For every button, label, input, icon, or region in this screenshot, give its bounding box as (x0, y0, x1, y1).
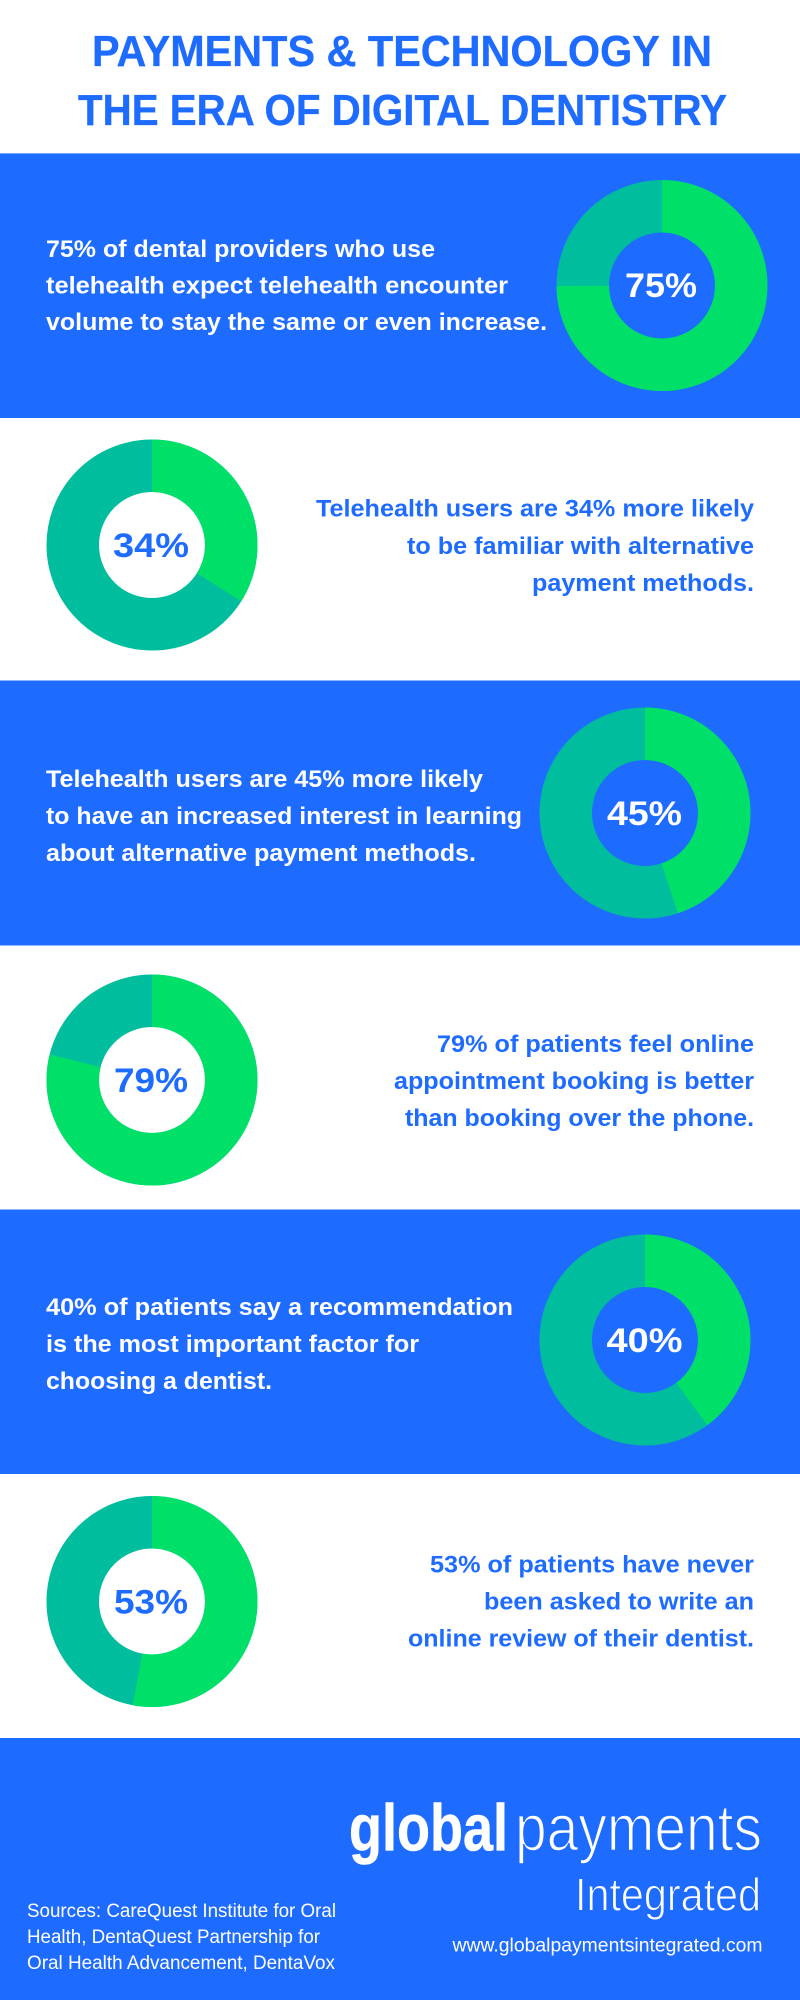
text block: sources: Oral Health Advancement, DentaVox (27, 1953, 335, 1974)
text block: 79% of patients: appointment booking is better (394, 1068, 754, 1095)
panel: 79% online booking (0, 946, 800, 1210)
donut chart: 79%: 79% (114, 1062, 188, 1100)
donut chart: 79% (73, 1001, 231, 1159)
text block: 75% of dental providers: telehealth expect telehealth encounter (46, 272, 508, 300)
logo: global payments integrated: global (349, 1790, 508, 1864)
title: PAYMENTS & TECHNOLOGY IN (92, 28, 712, 76)
donut chart: 34%: 34% (113, 527, 189, 565)
donut chart: 40% (566, 1261, 724, 1419)
text block: telehealth users 45% (46, 766, 522, 867)
logo: global payments integrated: Integrated (575, 1868, 761, 1920)
text block: 40% of patients: is the most important factor for (46, 1331, 419, 1358)
text block: telehealth users 45%: about alternative payment methods. (46, 840, 476, 867)
text block: 79% of patients (394, 1031, 754, 1132)
donut chart: 34% (73, 466, 231, 624)
text block: 53% of patients: been asked to write an (484, 1588, 754, 1616)
text block: 40% of patients (46, 1294, 513, 1395)
text block: 75% of dental providers (46, 236, 547, 336)
text block: telehealth users 34% (316, 496, 755, 597)
title (78, 28, 727, 135)
text block: sources: Sources: CareQuest Institute for Oral (27, 1901, 336, 1922)
donut chart: 53%: 53% (114, 1584, 188, 1622)
text block: 75% of dental providers: 75% of dental providers who use (46, 236, 435, 263)
text block: telehealth users 34%: payment methods. (532, 570, 754, 597)
donut chart: 75% (583, 206, 741, 365)
donut chart: 40%: 40% (606, 1322, 682, 1360)
donut chart: 53% (73, 1522, 231, 1681)
donut chart: 45%: 45% (607, 795, 682, 833)
panel: 45% increased interest (0, 680, 800, 946)
donut chart: 75%: 75% (625, 267, 697, 305)
text block: telehealth users 34%: Telehealth users are 34% more likely (316, 496, 755, 522)
text: website url: www.globalpaymentsintegrated.com (451, 1936, 762, 1956)
logo: global payments integrated: payments (515, 1790, 762, 1864)
text block: 53% of patients: 53% of patients have never (430, 1552, 754, 1578)
logo: global payments integrated (349, 1790, 762, 1920)
panel: 40% recommendation (0, 1210, 800, 1474)
donut chart: 45% (566, 734, 724, 892)
text block: sources (27, 1901, 336, 1974)
title: THE ERA OF DIGITAL DENTISTRY (78, 87, 727, 135)
text block: 53% of patients (408, 1552, 754, 1652)
text block: sources: Health, DentaQuest Partnership for (27, 1927, 321, 1948)
panel: footer (0, 1738, 800, 2000)
text block: telehealth users 34%: to be familiar with alternative (407, 533, 754, 560)
text block: 53% of patients: online review of their dentist. (408, 1626, 754, 1652)
panel: 53% online review (0, 1474, 800, 1738)
text block: 40% of patients: choosing a dentist. (46, 1368, 272, 1395)
text block: telehealth users 45%: to have an increased interest in learning (46, 803, 522, 830)
panel: 75% telehealth encounter volume (0, 153, 800, 418)
text block: 79% of patients: 79% of patients feel online (437, 1031, 754, 1058)
panel: 34% familiar with alternative payments (0, 418, 800, 680)
text block: 40% of patients: 40% of patients say a recommendation (46, 1294, 513, 1321)
text block: telehealth users 45%: Telehealth users are 45% more likely (46, 766, 484, 793)
text block: 79% of patients: than booking over the phone. (405, 1105, 754, 1132)
text block: 75% of dental providers: volume to stay the same or even increase. (46, 309, 547, 336)
